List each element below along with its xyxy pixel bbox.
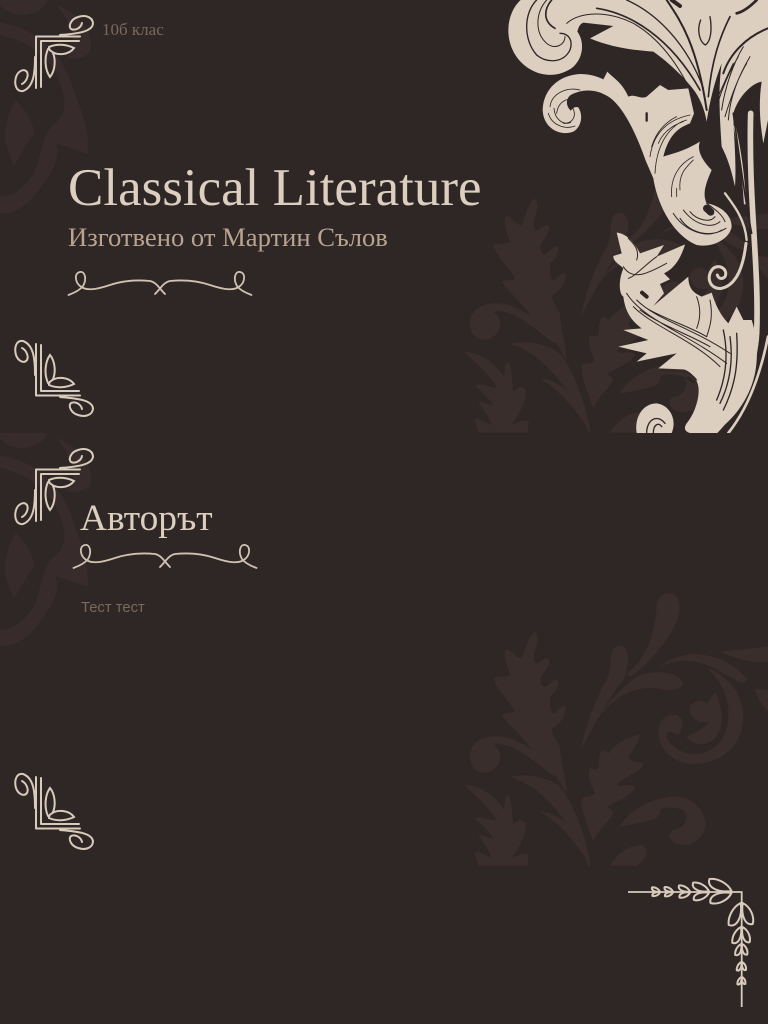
panel: title slide — [0, 0, 768, 433]
title: Classical Literature — [68, 159, 482, 217]
subtitle: Изготвено от Мартин Сълов — [68, 222, 388, 252]
faint floral ornament, right — [464, 593, 768, 866]
corner ornament, bottom left — [15, 774, 93, 849]
flourish divider — [68, 272, 252, 295]
panel: author slide — [0, 433, 768, 866]
body text: Тест тест — [81, 600, 145, 616]
corner ornament, bottom left — [15, 341, 93, 416]
faint floral ornament, right — [464, 188, 768, 432]
class label: 10б клас — [102, 20, 164, 39]
flourish divider — [74, 545, 256, 568]
faint floral ornament, left — [0, 0, 91, 213]
icon: leafy corner ornament, bottom right — [628, 879, 753, 1007]
corner ornament, top left — [15, 449, 93, 524]
large cream baroque ornament — [508, 0, 768, 433]
faint floral ornament, left — [0, 433, 91, 646]
corner ornament, top left — [15, 16, 93, 91]
heading: Авторът — [80, 498, 213, 539]
